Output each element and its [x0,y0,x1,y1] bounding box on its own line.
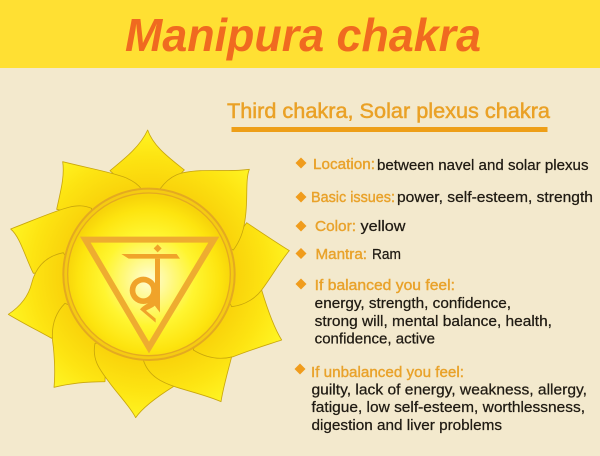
item: color [296,218,406,235]
subtitle underline [232,127,548,132]
item: if unbalanced: guilty, lack of energy, weakness, allergy, [312,382,587,398]
item: basic issues: Basic issues: [311,189,395,206]
triangle [80,237,219,353]
item: location [296,156,588,174]
item: location: between navel and solar plexus [377,157,588,174]
item: if balanced: strong will, mental balance, health, [315,313,552,330]
item: mantra: Ram [372,246,401,263]
bullet list [294,156,593,434]
item: basic issues: power, self-esteem, strength [397,189,593,206]
item: if unbalanced: digestion and liver problems [312,417,502,434]
item: if unbalanced: fatigue, low self-esteem, worthlessness, [312,399,585,416]
item: mantra: Mantra: [316,246,367,263]
inner disc [68,193,230,356]
item: if unbalanced [294,364,587,434]
outer ring [63,189,235,360]
item: if balanced: energy, strength, confidence, [315,295,511,312]
subtitle: Third chakra, Solar plexus chakra [227,99,550,123]
header band [0,0,600,68]
item: basic issues [296,189,593,206]
item: if unbalanced: If unbalanced you feel: [311,364,464,381]
item: color: yellow [360,218,406,235]
lotus petals [8,130,289,418]
item: if balanced: If balanced you feel: [315,277,455,294]
item: if balanced [296,277,552,348]
chakra symbol [8,130,289,418]
item: color: Color: [315,218,356,235]
item: location: Location: [313,156,375,173]
item: mantra [296,246,401,263]
title: Manipura chakra [125,9,481,61]
item: if balanced: confidence, active [315,330,435,348]
ram bija glyph [121,244,180,323]
